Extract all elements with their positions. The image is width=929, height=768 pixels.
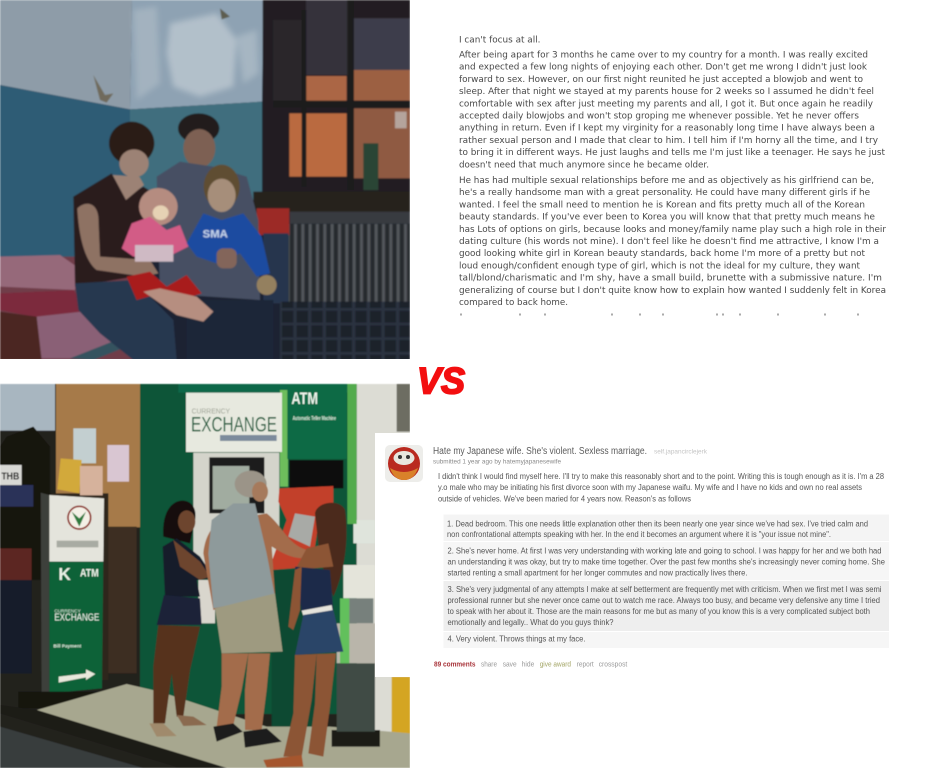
post domain: self.japancirclejerk [654, 448, 708, 456]
kiosk sign: CURRENCY [54, 609, 81, 614]
kiosk sign: EXCHANGE [54, 613, 100, 624]
exchange sign: CURRENCY [192, 406, 230, 415]
paragraph two: he's a really handsome man with a great personality. He could have many different girls if he [459, 188, 870, 198]
photo: foreigner and two women at an ATM [0, 383, 410, 768]
right wall [337, 384, 410, 735]
reason 1: 1. Dead bedroom. This one needs little explanation other then its been nearly one year since we've had sex. I've tried calm and [447, 520, 868, 529]
exchange sign [186, 393, 282, 452]
reason 1 [444, 514, 889, 541]
woman [73, 122, 177, 360]
sill [253, 192, 410, 212]
posters [57, 428, 129, 495]
post actions: save [503, 662, 517, 668]
exchange sign: EXCHANGE [191, 413, 277, 437]
paragraph one: rather sexual person and I made that clear to him. I tell him if I'm horny all the time, and I try [459, 136, 879, 146]
lower right wall [130, 102, 262, 200]
sidewalk [0, 684, 410, 768]
shop window [0, 384, 55, 431]
hanging clothes [0, 427, 50, 673]
paragraph one: and expected a few long nights of enjoying each other. Don't get me wrong I didn't just look [459, 63, 868, 73]
sign stand [332, 730, 380, 747]
reason 4 [444, 632, 889, 648]
paragraph two: has Lots of options on girls, because looks and money/family name play such a high role in their [459, 225, 886, 235]
paragraph two: compared to back home. [459, 298, 568, 308]
paragraph two: generalizing of course but I don't quite know how to explain how wanted I suddenly felt in Korea [459, 286, 886, 296]
paragraph one: accepted daily blowjobs and won't stop groping me whenever possible. Yet he never offers [459, 112, 859, 122]
post actions: share [481, 662, 497, 668]
post actions: crosspost [599, 662, 627, 668]
paragraph two: good looking white girl in Korean beauty standards, back home I'm more of a pretty but not [459, 249, 865, 259]
paragraph two: dating culture (his words not mine). I don't feel like he doesn't find me attractive, I know I'm a [459, 237, 879, 247]
reason 3: professional runner but she never once came out to watch me race. Always too busy, and became very defensive any time I tried [448, 596, 880, 605]
reason 4: 4. Very violent. Throws things at my face. [448, 635, 586, 644]
reason 1: non confrontational attempts speaking with her. In the end it becomes an argument where it is "your issue not mine". [447, 530, 831, 539]
atm sign: ATM [291, 389, 318, 408]
paragraph one [459, 50, 885, 170]
post title: Hate my Japanese wife. She's violent. Sexless marriage. [433, 446, 647, 457]
lower left wall [0, 85, 131, 260]
reason 2: started renting a small apartment for her longer commutes and now practically lives there. [448, 569, 748, 578]
paragraph one: sleep. After that night we stayed at my parents house for 2 weeks so I assumed he didn't feel [459, 87, 874, 97]
paragraph two: wanted. I feel the small need to mention he is Korean and fits pretty much all of the Korean [459, 200, 865, 210]
icon: daruma avatar [385, 445, 423, 482]
paragraph one: After being apart for 3 months he came over to my country for a month. I was really excited [459, 50, 868, 60]
paragraph one: doesn't need that much anymore since he became older. [459, 160, 709, 170]
post actions: give award [540, 662, 571, 668]
man [157, 113, 273, 360]
upper right wall with peeling paint [130, 0, 263, 109]
paragraph two: tall/blond/charismatic and I'm shy, have a small build, brunette with a submissive nature. I'm [459, 274, 882, 284]
paragraph one: to bring it in different ways. He just laughs and tells me I'm just like a teenager. He says he just [459, 148, 885, 158]
wall damage [93, 75, 113, 103]
green ATM wall [140, 384, 357, 714]
panel: girlfriend's post about her Korean boyfriend [459, 36, 886, 316]
tan pillar [56, 384, 140, 527]
opening line: I can't focus at all. [459, 36, 540, 46]
atm machine [272, 460, 343, 730]
post intro: I didn't think I would find myself here. I'll try to make this reasonably short and to the point. Writing this is tough enough as it is. I'm a 28 [438, 472, 885, 481]
submission line: submitted 1 year ago by hatemyjapanesewife [433, 458, 561, 466]
reason 3: emotionally and legally.. What do you guys think? [448, 618, 614, 627]
post actions: report [577, 662, 594, 668]
post actions: 89 comments [434, 662, 476, 668]
kiosk sign: ATM [80, 568, 99, 580]
window [263, 0, 410, 193]
paragraph one: anything in return. Even if I kept my virginity for a reasonably long time I have always been a [459, 124, 875, 134]
atm sign [287, 385, 347, 459]
hoodie print: SMA [203, 228, 228, 240]
atm sign: Automatic Teller Machine [293, 416, 336, 422]
baby [122, 188, 213, 322]
plaid blanket [280, 302, 410, 360]
paragraph two [459, 176, 886, 308]
green light strip [347, 384, 357, 524]
boy [187, 165, 277, 295]
paragraph two: loud enough/confident enough type of girl, which is not the ideal for my culture, they want [459, 261, 860, 271]
panel: Reddit post about a Japanese wife [375, 433, 889, 677]
upper left wall [0, 0, 132, 109]
post actions: hide [522, 662, 534, 668]
reason 3: to speak with her about it. Those are the main reasons for me but as many of you know this is a very complicated subject both [448, 607, 870, 616]
paragraph one: comfortable with sex after just meeting my parents and all, I got it. But once again he readily [459, 99, 874, 109]
interior booth [193, 453, 279, 623]
kiosk sign: Bill Payment [53, 643, 82, 648]
left woman [149, 501, 210, 737]
hanging clothes: THB [1, 471, 19, 482]
reason 3 [444, 581, 889, 631]
paragraph two: He has had multiple sexual relationships before me and as objectively as his girlfriend can be, [459, 176, 874, 186]
reason 2 [444, 542, 889, 580]
post intro [438, 472, 885, 503]
man at the ATM [203, 471, 307, 748]
kiosk sign: K [58, 564, 71, 584]
paragraph one: forward to sex. However, on our first night reunited he just accepted a blowjob and went to [459, 75, 863, 85]
reason 2: 2. She's never home. At first I was very understanding with working late and going to school. I was happy for her and we both had [448, 547, 882, 556]
post intro: y.o male who may be initiating his first divorce soon with my Japanese waifu. My wife and I have no kids and own no real assets [438, 483, 862, 492]
radiator [289, 212, 410, 307]
right woman [263, 503, 346, 767]
reason 3: 3. She's very judgmental of any attempts I make at self betterment are frequently met with criticism. When we first met I was semi [448, 585, 882, 594]
post actions [434, 662, 627, 668]
bed quilt [0, 255, 143, 360]
paragraph two: beauty standards. If you've ever been to Korea you will know that that pretty much means he [459, 213, 875, 223]
reason 2: an understanding it was okay, but try to make time together. Over the past few months she's increasingly never coming home. She [448, 558, 886, 567]
post intro: outside of vehicles. We've been maried for 4 years now. Reason's as follows [438, 494, 691, 503]
kiosk sign [18, 493, 117, 708]
photo: family in a worn room [0, 0, 410, 359]
red cushion [257, 208, 289, 235]
